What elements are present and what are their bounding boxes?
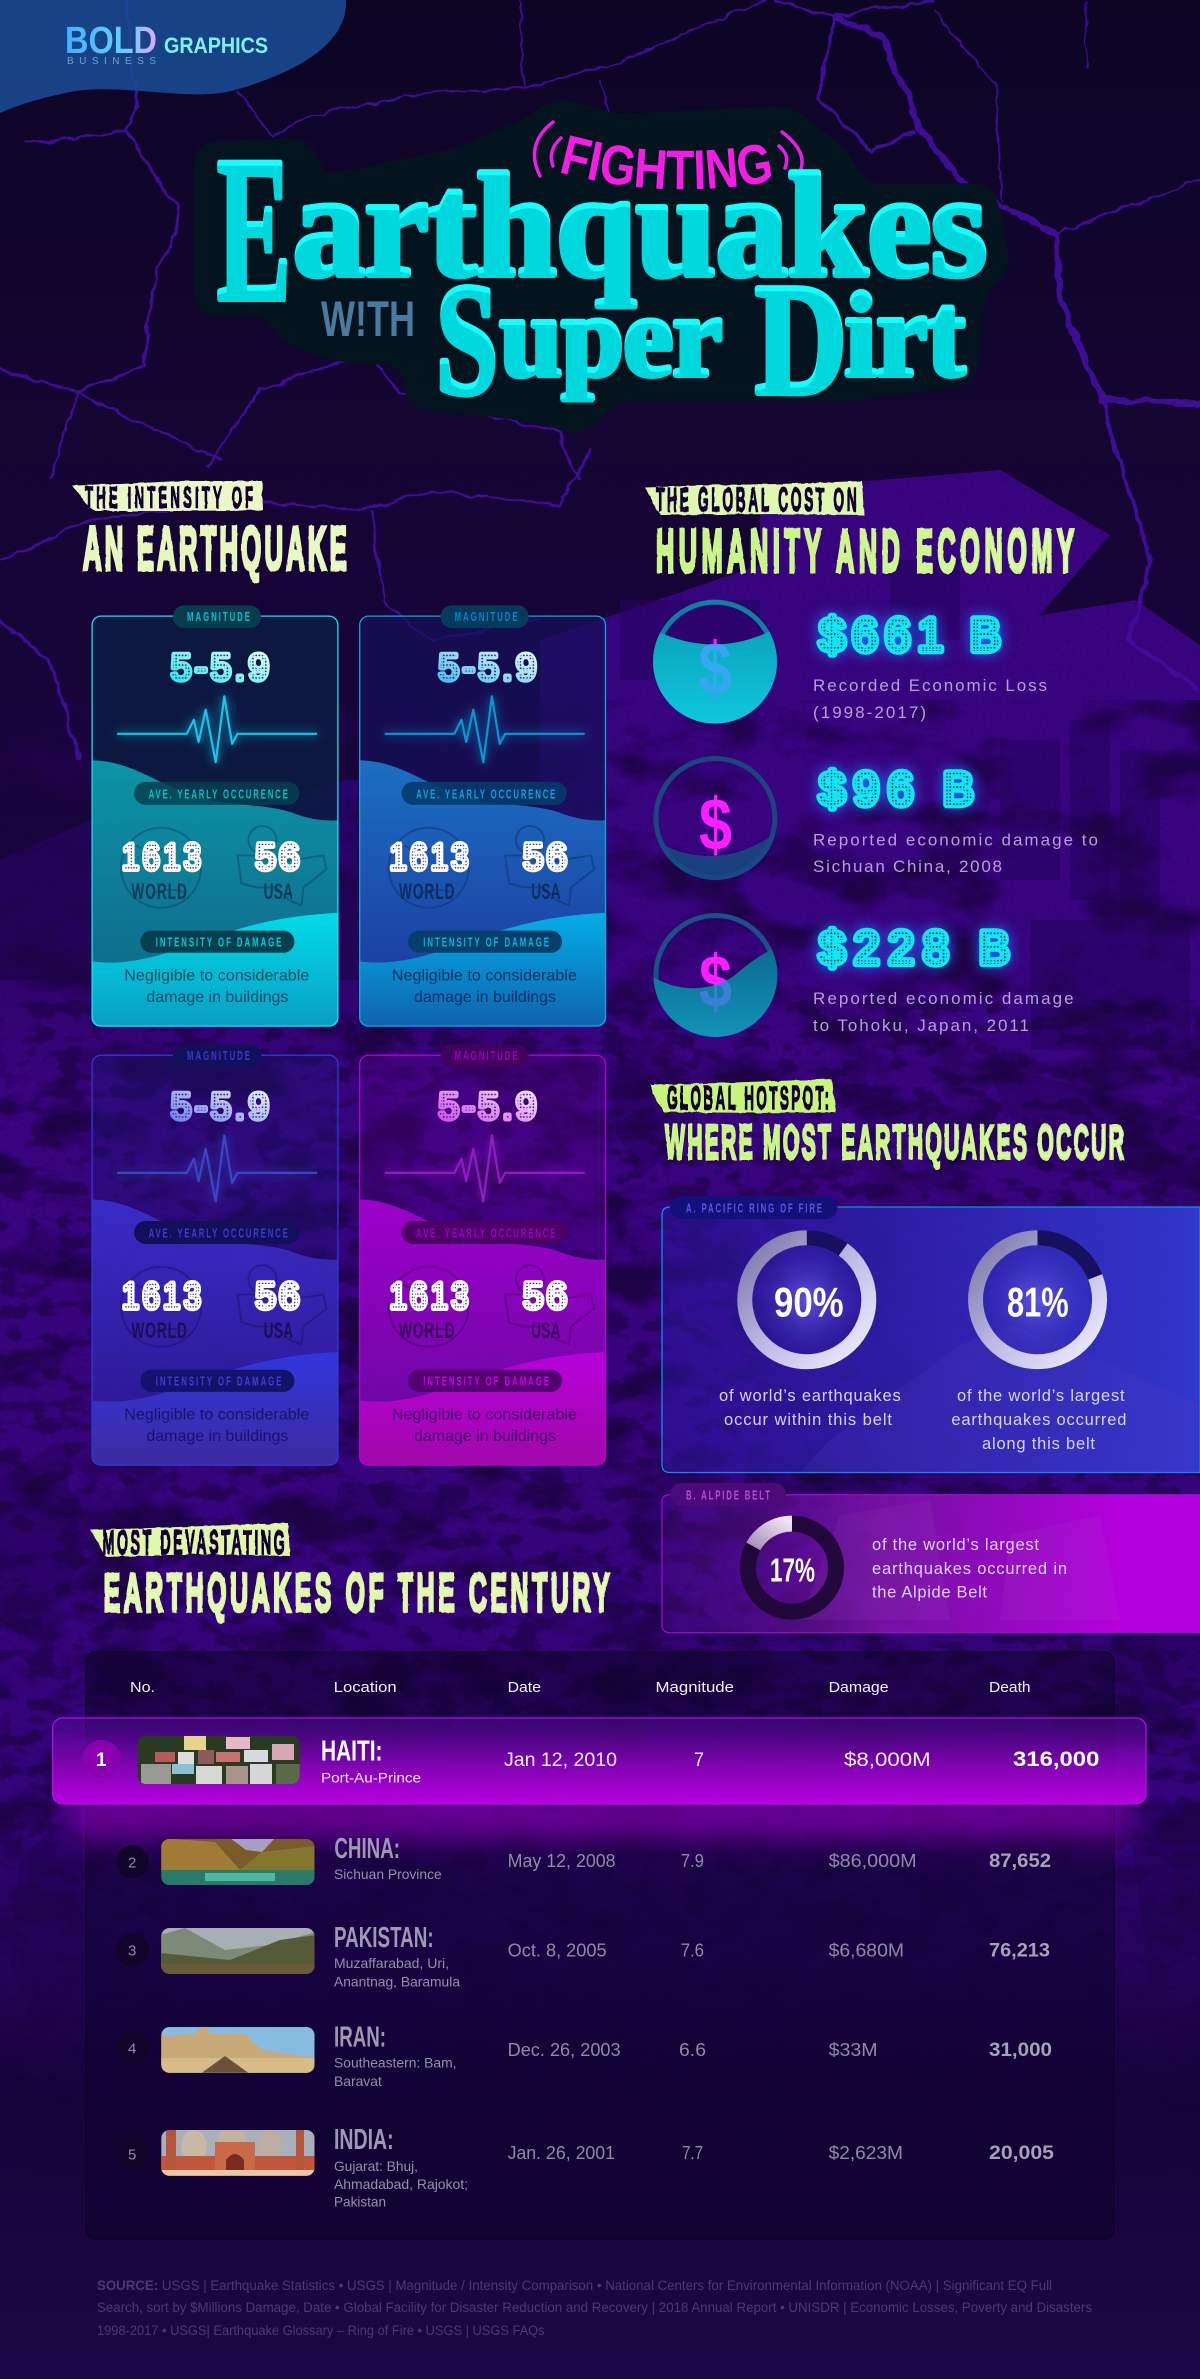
description: Negligible to considerable (392, 1407, 577, 1424)
table header: Location (334, 1679, 397, 1696)
wave: middle band (359, 1200, 606, 1466)
value: magnitude range: 5-5.9 (438, 647, 536, 688)
caption: 17 percent: earthquakes occurred in (872, 1560, 1067, 1578)
row 2: china: 87,652 (989, 1851, 1051, 1872)
row 3: pakistan: $6,680M (829, 1941, 904, 1961)
panel: magnitude card 2 (359, 605, 606, 1027)
caption: 90 percent (719, 1387, 901, 1429)
heading: earthquakes: arthquakes (293, 144, 987, 308)
pill: magnitude: MAGNITUDE (455, 1049, 518, 1064)
table: most devastating earthquakes (53, 1652, 1146, 2239)
row 4: iran: 31,000 (989, 2040, 1052, 2061)
row 5: india: 7.7 (682, 2143, 703, 2163)
pill: yearly occurrence (402, 782, 567, 805)
icon: dollar coin 2 (650, 758, 780, 900)
stat: world (122, 837, 201, 904)
logo: BOLD (65, 20, 157, 62)
pill: yearly occurrence: AVE. YEARLY OCCURENCE (416, 1227, 555, 1241)
caption: 17 percent (872, 1536, 1067, 1602)
location: iran: Southeastern: Bam, (334, 2055, 456, 2071)
seismograph line (385, 696, 585, 762)
stat: world: 1613 (390, 837, 468, 878)
table header: Damage (829, 1679, 889, 1696)
table header: No. (130, 1679, 155, 1696)
wave: middle band (91, 760, 339, 1027)
location: china (334, 1833, 442, 1882)
description (392, 1407, 577, 1445)
source notes (97, 2278, 1092, 2338)
description (392, 968, 577, 1006)
stat: usa (255, 1276, 299, 1343)
location: india: INDIA: (334, 2124, 394, 2156)
pill: intensity: INTENSITY OF DAMAGE (156, 1375, 281, 1389)
stat: 228 billion (650, 916, 1074, 1050)
value: magnitude range: 5-5.9 (438, 1086, 536, 1127)
caption: Sichuan China, 2008 (813, 857, 1002, 876)
location: pakistan: Muzaffarabad, Uri, (334, 1955, 449, 1971)
stat: usa (523, 836, 567, 904)
logo: GRAPHICS (164, 33, 268, 58)
source notes: Search, sort by $Millions Damage, Date • Global Facility for Disaster Reduction and Recovery | 2018 Annual Report • UNISDR | Economic Losses, Poverty and Disasters (97, 2300, 1092, 2315)
pill: magnitude: MAGNITUDE (187, 1049, 250, 1064)
pill: yearly occurrence (402, 1221, 567, 1244)
location: iran: IRAN: (334, 2022, 386, 2054)
row 3: pakistan: Oct. 8, 2005 (508, 1941, 607, 1961)
pill: intensity (140, 931, 294, 953)
wave: middle band (91, 1200, 339, 1466)
value: $228 B (819, 921, 1010, 974)
heading: super dirt: S (436, 250, 498, 428)
stat: world: 1613 (122, 837, 201, 878)
pill: region b: B. ALPIDE BELT (686, 1489, 770, 1503)
stat: usa: 56 (255, 1276, 299, 1316)
row 2: china: May 12, 2008 (508, 1851, 616, 1871)
location: india: Pakistan (334, 2194, 386, 2210)
pill: intensity (408, 1370, 562, 1392)
stat: usa: USA (264, 879, 293, 904)
pill: magnitude (173, 605, 261, 628)
stat: usa: 56 (255, 836, 299, 877)
row 4: iran: 6.6 (679, 2040, 706, 2060)
pill: intensity: INTENSITY OF DAMAGE (156, 936, 281, 950)
description: damage in buildings (146, 1428, 288, 1445)
stat: world (122, 1276, 201, 1343)
heading: super dirt: D (755, 250, 847, 428)
row 1: haiti: $8,000M (844, 1750, 931, 1771)
icon: dollar coin 2: $ (699, 783, 732, 866)
location: haiti (321, 1736, 421, 1786)
row 4: iran (116, 2022, 1052, 2089)
stat: usa (523, 1276, 567, 1343)
photo: haiti hillside (137, 1735, 301, 1785)
heading: global hotspot: WHERE MOST EARTHQUAKES OCCUR (665, 1114, 1124, 1169)
icon: dollar coin 1: $ (698, 627, 732, 710)
wave: bottom band (91, 913, 339, 1027)
stat: world: WORLD (131, 1318, 187, 1343)
caption: 17 percent: of the world’s largest (872, 1536, 1039, 1554)
pill: magnitude (173, 1044, 261, 1067)
caption: Recorded Economic Loss (813, 676, 1047, 695)
pill: intensity (140, 1370, 294, 1392)
seismograph line (117, 696, 317, 762)
heading: super dirt: irt (845, 268, 965, 401)
pill: magnitude: MAGNITUDE (187, 610, 250, 625)
building backdrop (800, 1500, 1120, 1620)
stat: world (390, 837, 468, 904)
location: india (334, 2124, 468, 2210)
stat: usa: 56 (523, 1276, 567, 1316)
icon: globe (389, 828, 469, 908)
description (124, 1407, 309, 1445)
location: india: Gujarat: Bhuj, (334, 2158, 418, 2174)
panel: magnitude card 1 (91, 605, 339, 1027)
wave: bottom band (359, 1352, 606, 1466)
value: magnitude range: 5-5.9 (171, 1086, 269, 1127)
description: Negligible to considerable (392, 968, 577, 985)
caption (813, 676, 1047, 722)
stat: world: 1613 (122, 1276, 201, 1317)
location: china: CHINA: (334, 1833, 400, 1865)
stat: usa: 56 (523, 836, 567, 877)
stat: usa: USA (531, 1318, 561, 1343)
row 5: india (116, 2124, 1054, 2210)
icon: usa map and pin (505, 1265, 594, 1344)
location: haiti: HAITI: (321, 1736, 382, 1768)
heading: the intensity of an earthquake: AN EARTHQUAKE (83, 515, 347, 583)
row 5: india: 20,005 (989, 2143, 1054, 2164)
description: damage in buildings (414, 989, 556, 1006)
row 1: haiti: 1 (96, 1750, 107, 1771)
row 5: india: 5 (128, 2146, 136, 2164)
heading: global hotspot (650, 1079, 1124, 1169)
heading: global cost: THE GLOBAL COST ON (656, 482, 857, 519)
stat: usa: USA (531, 879, 561, 904)
table header: Date (508, 1679, 541, 1696)
icon: usa map and pin (237, 826, 326, 905)
icon: dollar coin 3: $ (699, 940, 732, 1023)
row 2: china: 7.9 (681, 1851, 704, 1871)
value: $96 B (819, 762, 974, 815)
icon: globe (389, 1267, 469, 1347)
caption: 81 percent (951, 1387, 1126, 1453)
description: damage in buildings (146, 989, 288, 1006)
description: Negligible to considerable (124, 968, 309, 985)
pill: region b (670, 1483, 786, 1506)
icon: usa map and pin (237, 1265, 326, 1344)
wave: bottom band (359, 913, 606, 1027)
caption: 17 percent: the Alpide Belt (872, 1584, 987, 1602)
icon: usa map and pin (505, 826, 594, 905)
row 2: china: $86,000M (829, 1851, 917, 1871)
pill: yearly occurrence: AVE. YEARLY OCCURENCE (149, 1227, 288, 1241)
logo (0, 0, 346, 113)
table header: Death (989, 1679, 1031, 1696)
logo: BUSINESS (67, 56, 156, 67)
location: pakistan (334, 1922, 460, 1990)
heading: most devastating: MOST DEVASTATING (102, 1523, 285, 1562)
donut: 81 percent (976, 1238, 1100, 1362)
caption: Reported economic damage to (813, 830, 1098, 850)
icon: dollar coin 3: $ (699, 940, 732, 1023)
row 3: pakistan: 76,213 (989, 1941, 1050, 1962)
location: haiti: Port-Au-Prince (321, 1770, 421, 1786)
row 3: pakistan: 3 (128, 1942, 136, 1960)
description (124, 968, 309, 1006)
title (194, 100, 1008, 432)
pill: yearly occurrence (134, 782, 299, 805)
donut: 90 percent: 90% (774, 1278, 844, 1326)
icon: globe (121, 1267, 201, 1347)
heading: with: W!TH (321, 291, 415, 347)
stat: world: WORLD (399, 879, 454, 904)
icon: dollar coin 1 (640, 602, 790, 740)
wave: middle band (359, 760, 606, 1027)
stat: world (390, 1276, 468, 1343)
description: damage in buildings (414, 1428, 556, 1445)
row 4: iran: 4 (128, 2040, 136, 2058)
donut: 81 percent: 81% (1007, 1278, 1069, 1326)
pill: yearly occurrence: AVE. YEARLY OCCURENCE (149, 787, 288, 802)
location: india: Ahmadabad, Rajokot; (334, 2176, 468, 2192)
volcano backdrop (800, 1325, 1200, 1472)
stat: usa (255, 836, 299, 904)
stat: 661 billion (640, 602, 1047, 740)
location: pakistan: PAKISTAN: (334, 1922, 434, 1954)
pill: region a: A. PACIFIC RING OF FIRE (686, 1201, 822, 1216)
panel: magnitude card 3 (91, 1044, 339, 1466)
heading: fighting: FIGHTING (561, 135, 772, 190)
pill: magnitude (441, 1044, 529, 1067)
caption: 90 percent: occur within this belt (724, 1411, 892, 1429)
heading: global cost (645, 481, 1074, 585)
panel: alpide belt (662, 1483, 1200, 1633)
heading: the intensity of an earthquake (72, 480, 347, 583)
panel: pacific ring of fire (662, 1196, 1200, 1472)
pill: intensity (408, 931, 562, 953)
stat: world: WORLD (131, 879, 187, 904)
pill: intensity: INTENSITY OF DAMAGE (423, 1375, 549, 1389)
location: iran (334, 2022, 456, 2089)
pill: yearly occurrence (134, 1221, 299, 1244)
source notes: SOURCE: USGS | Earthquake Statistics • USGS | Magnitude / Intensity Comparison • National Centers for Environmental Information (NOAA) | Significant EQ Full (97, 2278, 1052, 2293)
heading: most devastating: EARTHQUAKES OF THE CENTURY (104, 1562, 610, 1623)
row 5: india: Jan. 26, 2001 (508, 2143, 615, 2163)
heading: the intensity of an earthquake: THE INTENSITY OF (85, 480, 253, 514)
heading: most devastating (90, 1523, 610, 1623)
stat: 96 billion (650, 758, 1098, 900)
pill: intensity: INTENSITY OF DAMAGE (423, 936, 549, 950)
row 3: pakistan: 7.6 (681, 1941, 704, 1961)
row 4: iran: Dec. 26, 2003 (508, 2040, 621, 2060)
pill: yearly occurrence: AVE. YEARLY OCCURENCE (416, 787, 555, 802)
value: $661 B (819, 608, 1001, 661)
stat: usa: USA (264, 1318, 293, 1343)
source notes: 1998-2017 • USGS| Earthquake Glossary – Ring of Fire • USGS | USGS FAQs (97, 2323, 545, 2338)
value: magnitude range: 5-5.9 (171, 647, 269, 688)
row 1: haiti (53, 1718, 1146, 1804)
row 1: haiti: 7 (694, 1750, 704, 1771)
heading: global hotspot: GLOBAL HOTSPOT: (667, 1082, 829, 1117)
icon: dollar coin 3 (650, 916, 780, 1050)
location: pakistan: Anantnag, Baramula (334, 1974, 460, 1990)
row 1: haiti: Jan 12, 2010 (504, 1750, 617, 1771)
pill: region a (670, 1196, 838, 1219)
seismograph line (385, 1136, 585, 1201)
photo: jiuzhaigou lake (160, 1838, 316, 1886)
caption (813, 830, 1098, 876)
heading: super dirt: uper (500, 273, 722, 401)
donut: 17 percent: 17% (770, 1552, 815, 1588)
row 2: china (116, 1833, 1051, 1886)
table header (130, 1679, 1031, 1696)
description: Negligible to considerable (124, 1407, 309, 1424)
stat: world: 1613 (390, 1276, 468, 1317)
row 2: china: 2 (128, 1854, 136, 1872)
row 4: iran: $33M (829, 2040, 878, 2060)
row 1: haiti: 316,000 (1013, 1748, 1099, 1771)
icon: globe (121, 828, 201, 908)
caption: Reported economic damage (813, 989, 1074, 1008)
wave: bottom band (91, 1352, 339, 1466)
caption: 90 percent: of world’s earthquakes (719, 1387, 901, 1405)
signal arcs (534, 122, 802, 182)
caption: 81 percent: along this belt (982, 1435, 1095, 1453)
seismograph line (117, 1136, 317, 1201)
pill: magnitude (441, 605, 529, 628)
caption: (1998-2017) (813, 703, 926, 722)
photo: jama masjid (160, 2126, 316, 2177)
pill: magnitude: MAGNITUDE (455, 610, 518, 625)
icon: dollar coin 1: $ (698, 627, 732, 710)
table header: Magnitude (656, 1679, 734, 1696)
heading: global cost: HUMANITY AND ECONOMY (656, 517, 1074, 585)
caption: 81 percent: of the world’s largest (957, 1387, 1125, 1405)
photo: pakistan valley (160, 1927, 316, 1975)
stat: world: WORLD (399, 1318, 454, 1343)
caption: 81 percent: earthquakes occurred (951, 1411, 1126, 1429)
row 3: pakistan (116, 1922, 1050, 1990)
donut: 17 percent (748, 1524, 836, 1612)
caption (813, 989, 1074, 1035)
location: iran: Baravat (334, 2073, 382, 2089)
location: china: Sichuan Province (334, 1866, 442, 1882)
row 5: india: $2,623M (829, 2143, 903, 2163)
donut: 90 percent (745, 1238, 869, 1362)
heading: earthquakes: E (217, 114, 291, 344)
caption: to Tohoku, Japan, 2011 (813, 1016, 1029, 1035)
panel: magnitude card 4 (359, 1044, 606, 1466)
photo: bam citadel (160, 2026, 316, 2074)
